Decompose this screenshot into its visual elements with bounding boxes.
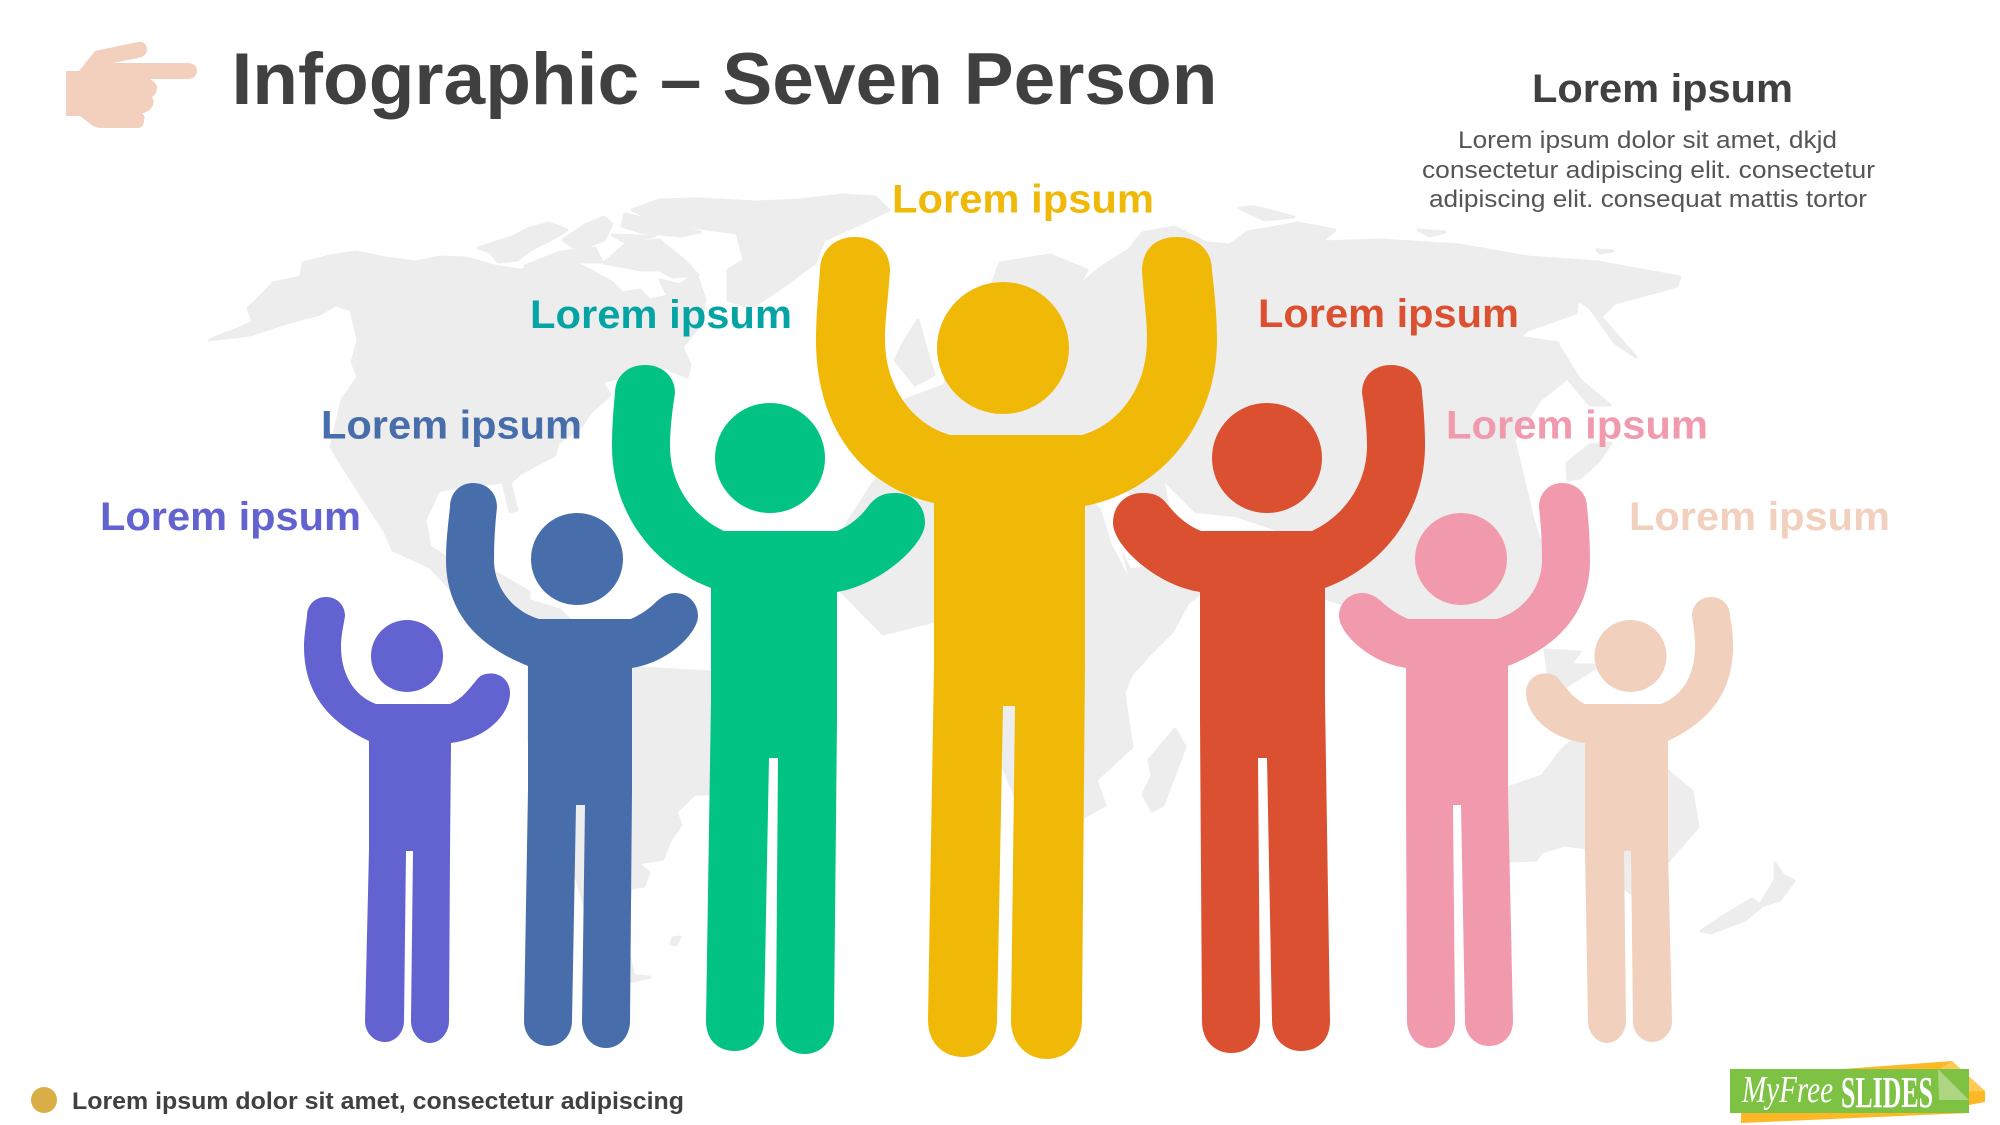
map: europe and asia: [905, 223, 1680, 640]
map: australia: [1490, 730, 1698, 900]
person 7: beige: [1526, 597, 1733, 1043]
label: purple: Lorem ipsum: [100, 495, 361, 539]
person 4: yellow: [816, 237, 1217, 1059]
map: japan: [1567, 443, 1611, 480]
label: pink: Lorem ipsum: [1446, 404, 1708, 448]
label: blue: Lorem ipsum: [321, 404, 582, 448]
footer text: Lorem ipsum dolor sit amet, consectetur adipiscing: [72, 1088, 684, 1115]
icon: footer bullet: [31, 1087, 57, 1113]
person 1: purple: [304, 597, 510, 1043]
icon: pointing hand: [66, 42, 197, 128]
label: yellow: Lorem ipsum: [892, 178, 1154, 222]
logo text: SLIDES: SLIDES: [1841, 1068, 1933, 1117]
heading: top right: Lorem ipsum: [1532, 67, 1793, 111]
map: arctic islands: [478, 214, 700, 277]
body text: top right: Lorem ipsum dolor sit amet, dkjd: [1458, 127, 1837, 154]
person 6: pink: [1339, 483, 1590, 1048]
map: seas cut-outs: [1098, 483, 1280, 575]
title: Infographic – Seven Person: [232, 39, 1218, 120]
map: africa: [840, 460, 1205, 830]
text block: top right: [1422, 67, 1875, 213]
map: new zealand: [1701, 863, 1794, 933]
map: southeast asia islands: [1430, 570, 1600, 690]
body text: top right: adipiscing elit. consequat mattis tortor: [1429, 186, 1867, 213]
label: teal: Lorem ipsum: [530, 293, 792, 337]
map: north america: [209, 252, 705, 640]
person 5: red: [1113, 365, 1425, 1053]
body text: top right: [1422, 127, 1875, 213]
footer note: [31, 1087, 684, 1115]
map: south america: [528, 600, 740, 982]
label: beige: Lorem ipsum: [1629, 495, 1890, 539]
map: sakhalin: [1558, 345, 1610, 405]
map: arctic asia islands: [1239, 207, 1613, 253]
logo text: MyFree: MyFree: [1741, 1069, 1833, 1111]
body text: top right: consectetur adipiscing elit. consectetur: [1422, 157, 1875, 184]
label: red: Lorem ipsum: [1258, 292, 1519, 336]
world map background: [209, 195, 1794, 982]
map: falkland islands: [671, 937, 680, 945]
person 2: blue: [446, 483, 698, 1048]
map: madagascar: [1143, 729, 1185, 811]
map: greenland: [632, 195, 889, 308]
logo: MyFreeSlides: [1730, 1061, 1985, 1123]
map: british isles: [895, 320, 934, 385]
person 3: green: [612, 365, 925, 1054]
